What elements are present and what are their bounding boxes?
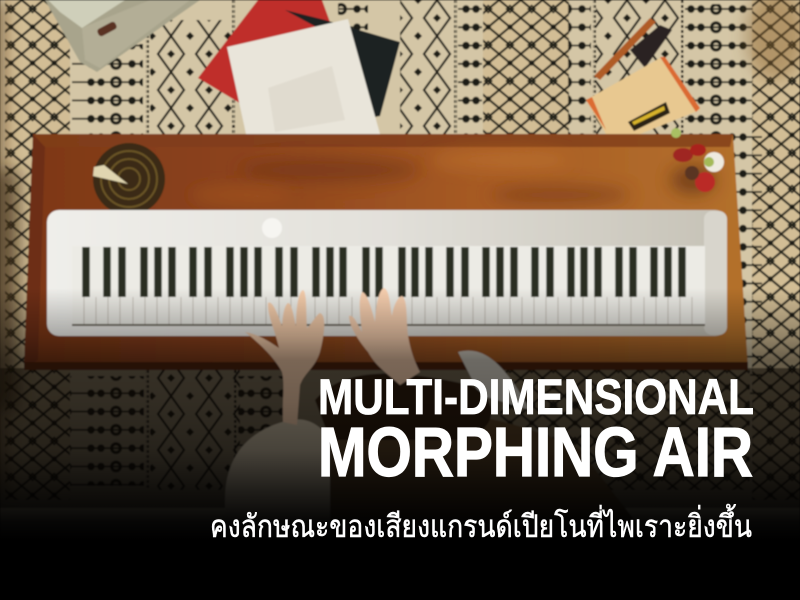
right hand and arm xyxy=(349,288,420,385)
dark book xyxy=(285,10,400,118)
black keys xyxy=(86,247,682,297)
child's hair xyxy=(315,374,491,440)
left hand and arm xyxy=(245,290,324,425)
white key dividers xyxy=(84,297,692,325)
digital piano xyxy=(47,210,727,336)
sheet music xyxy=(227,19,380,134)
woven coaster xyxy=(93,143,165,215)
red book xyxy=(198,0,330,108)
wooden table xyxy=(24,134,748,370)
headline xyxy=(318,369,754,491)
control knob xyxy=(262,218,282,238)
suitcase xyxy=(45,0,200,72)
notebook xyxy=(586,57,700,134)
child's sweater xyxy=(225,351,650,540)
flower decoration xyxy=(671,128,724,194)
brush xyxy=(594,18,672,80)
